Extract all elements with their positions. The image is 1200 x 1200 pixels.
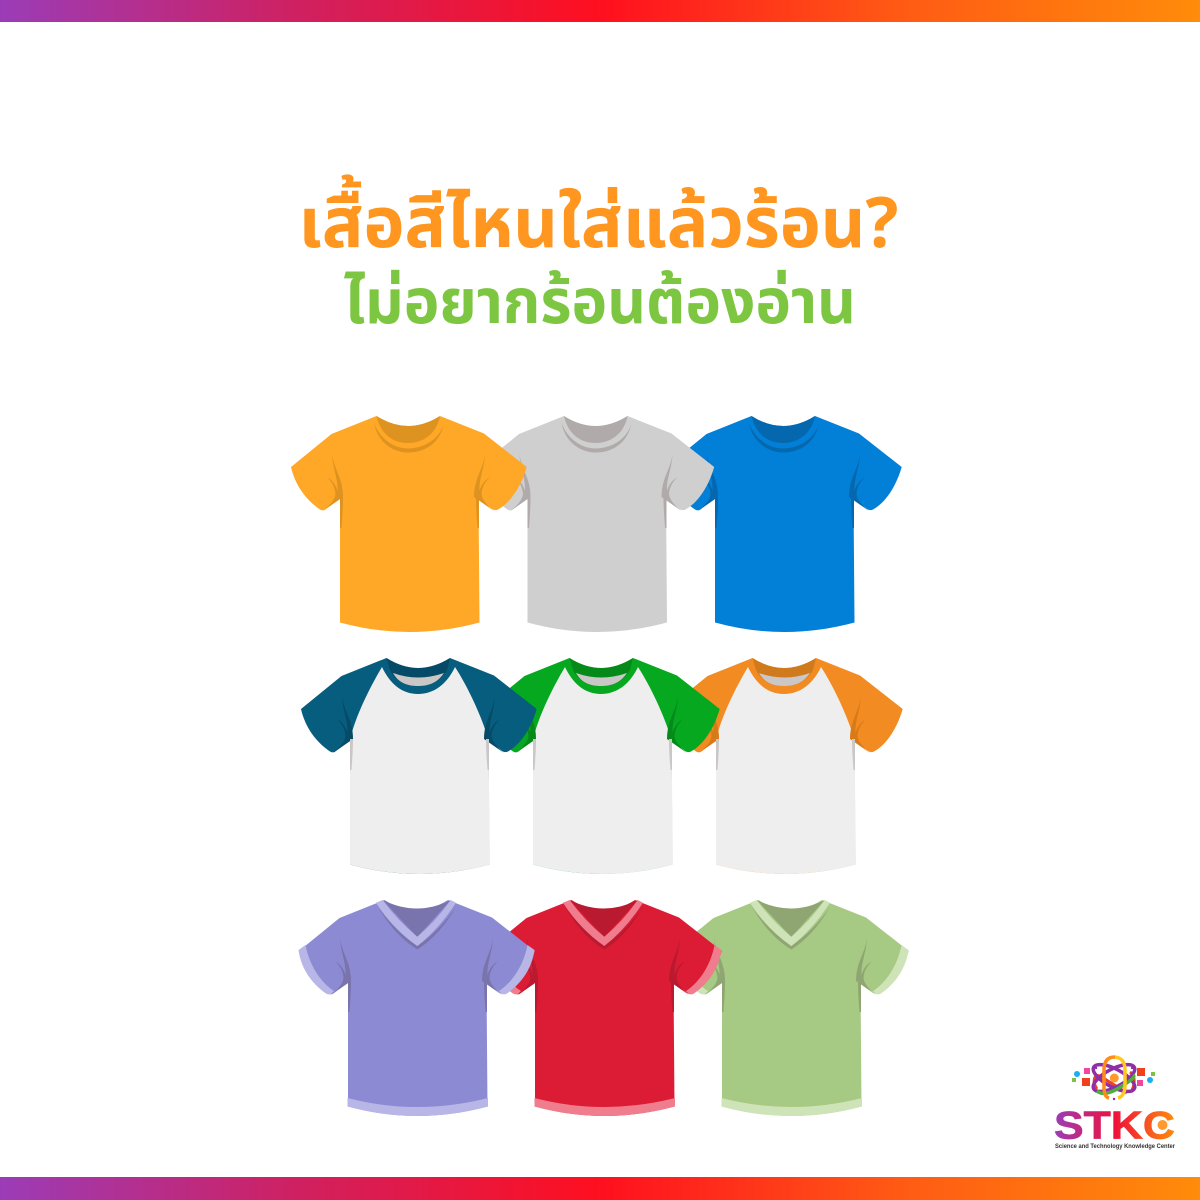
shirt: teal raglan: [301, 658, 537, 874]
shirt: green raglan: [484, 658, 720, 874]
top gradient bar: [0, 0, 1200, 22]
shirt: red v-neck: [486, 900, 722, 1116]
subtitle: ไม่อยากร้อนต้องอ่าน: [344, 257, 856, 351]
title: เสื้อสีไหนใส่แล้วร้อน?: [298, 173, 898, 279]
logo dot inside C: [1158, 1120, 1168, 1130]
logo wordmark: STKC: [1054, 1104, 1175, 1148]
shirt: purple v-neck: [298, 900, 535, 1116]
shirt: orange raglan: [667, 658, 903, 874]
STKC logo: [1054, 1057, 1176, 1150]
bottom gradient bar: [0, 1177, 1200, 1200]
logo tagline: Science and Technology Knowledge Center: [1055, 1144, 1176, 1150]
shirt: orange crew neck: [291, 416, 527, 632]
shirt: gray crew neck: [478, 416, 714, 632]
icon: atom emblem: [1072, 1057, 1155, 1100]
shirt: green v-neck: [672, 900, 909, 1116]
shirt: blue crew neck: [666, 416, 902, 632]
